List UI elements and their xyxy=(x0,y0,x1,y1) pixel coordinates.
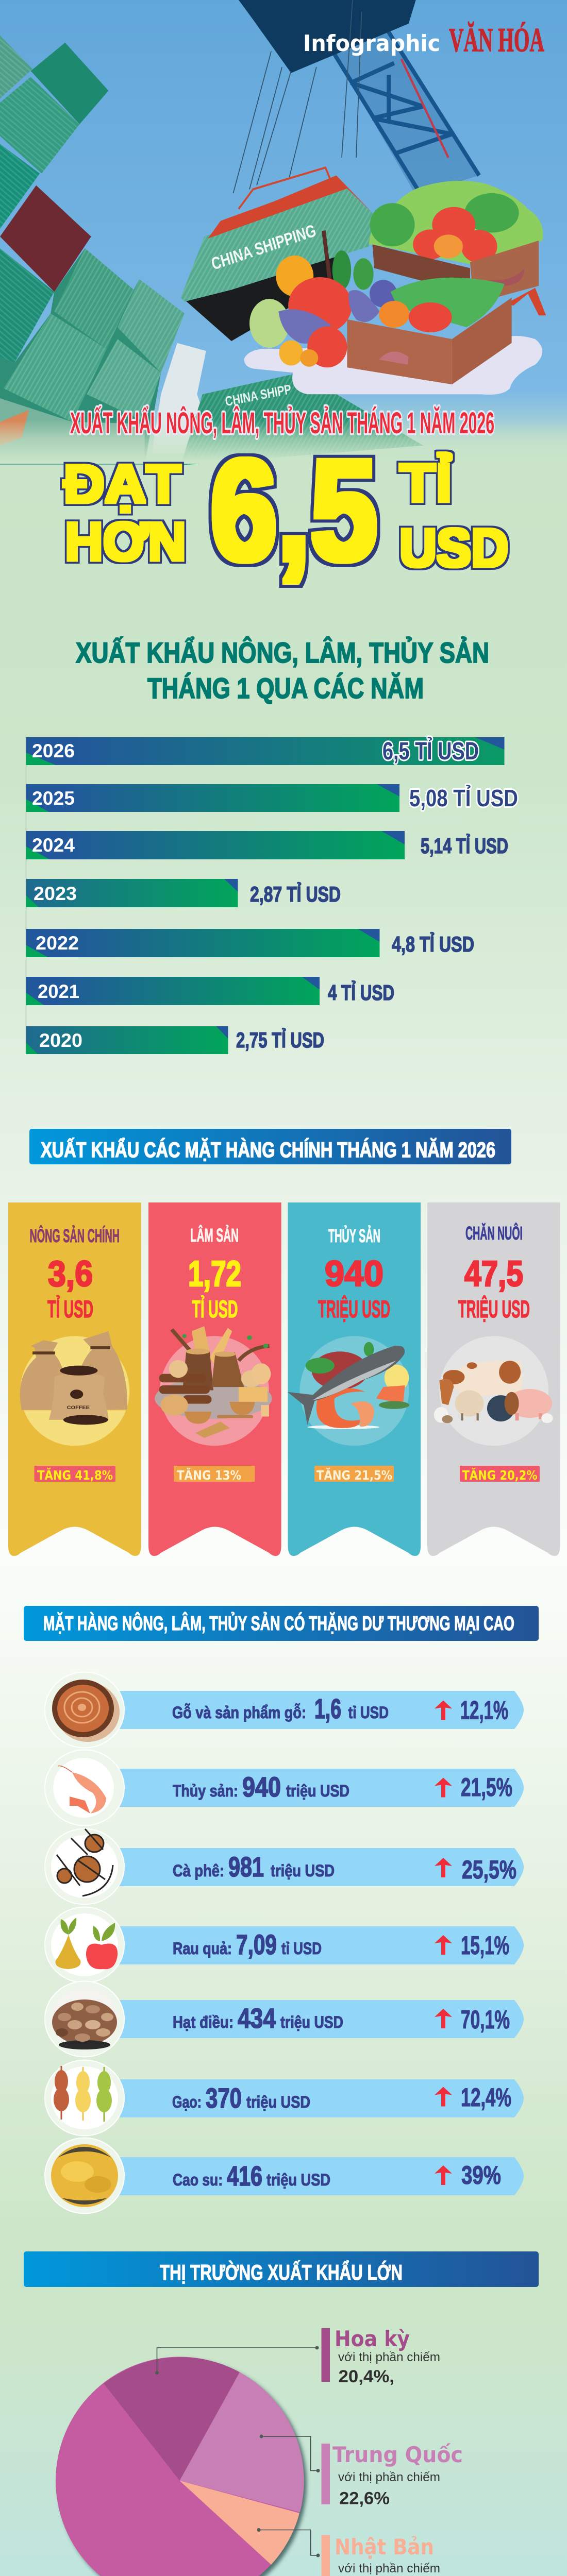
label and value xyxy=(173,1772,349,1803)
label and value: Cao su: xyxy=(173,2171,223,2189)
panel: forestry products: TỈ USD xyxy=(192,1295,238,1323)
growth badge: TĂNG 41,8% xyxy=(37,1467,113,1483)
legend: China xyxy=(322,2442,463,2508)
label and value: 7,09 xyxy=(236,1929,277,1960)
label and value xyxy=(172,1693,389,1724)
bar 2026: 6,5 TỈ USD xyxy=(382,737,479,765)
headline: tỉ usd: USD xyxy=(399,518,508,578)
panel: aquatic products xyxy=(288,1202,421,1556)
slice: Japan xyxy=(179,2481,299,2565)
chart title: THÁNG 1 QUA CÁC NĂM xyxy=(147,672,424,704)
growth percent: 21,5% xyxy=(461,1773,512,1802)
growth badge: TĂNG 13% xyxy=(177,1467,241,1483)
bar 2026: 2026 xyxy=(32,740,75,761)
bar 2026 xyxy=(26,737,504,765)
slice: other markets xyxy=(56,2357,304,2576)
panel: aquatic products: TRIỆU USD xyxy=(318,1295,390,1323)
bar 2022 xyxy=(26,929,474,957)
icon: coffee sacks xyxy=(20,1331,129,1446)
label and value: tỉ USD xyxy=(348,1703,389,1722)
label and value: tỉ USD xyxy=(281,1939,322,1958)
icon: cashew nuts xyxy=(52,1999,117,2049)
row: coffee xyxy=(45,1829,524,1904)
header brand: Infographic xyxy=(303,30,440,57)
label and value: triệu USD xyxy=(280,2013,343,2031)
bar 2022: 4,8 TỈ USD xyxy=(392,931,474,956)
bar 2024 xyxy=(26,831,508,859)
legend: China: Trung Quốc xyxy=(332,2442,463,2467)
row: aquatic products xyxy=(45,1750,524,1826)
icon: timber and wood products xyxy=(155,1326,272,1446)
bar 2025 xyxy=(26,784,518,812)
slice: United States xyxy=(104,2357,240,2481)
panel: main agricultural products: 3,6 xyxy=(48,1253,93,1294)
lower container with lettering xyxy=(181,372,423,465)
panel: main agricultural products: TỈ USD xyxy=(47,1295,93,1323)
bar 2024: 2024 xyxy=(32,835,75,856)
legend: Japan: Nhật Bản xyxy=(335,2534,434,2560)
icon: coffee beans xyxy=(57,1829,113,1896)
panel: forestry products xyxy=(148,1202,281,1556)
arrow up xyxy=(435,2165,452,2185)
arrow up xyxy=(435,2009,452,2028)
icon: pear and apple xyxy=(56,1918,118,1969)
panel: livestock xyxy=(427,1202,560,1556)
arrow up xyxy=(435,1858,452,1877)
icon: fish and seafood xyxy=(288,1336,409,1446)
label and value: 1,6 xyxy=(314,1693,341,1724)
icon: farm animals xyxy=(434,1336,553,1446)
label and value: 370 xyxy=(206,2083,242,2114)
row: rice xyxy=(45,2060,524,2136)
bar 2023: 2,87 TỈ USD xyxy=(250,882,341,906)
pie chart of export markets xyxy=(56,2357,304,2576)
legend: United States: với thị phần chiếm xyxy=(338,2350,440,2364)
label and value: 434 xyxy=(238,2003,276,2034)
headline: tỉ usd xyxy=(399,453,508,578)
label and value: 981 xyxy=(228,1852,264,1883)
stacked containers on the left xyxy=(0,36,217,465)
label and value xyxy=(173,1929,322,1960)
icon: rice stalks xyxy=(54,2066,112,2122)
bar 2020: 2020 xyxy=(39,1030,82,1051)
icon: shrimp xyxy=(58,1766,106,1814)
icon: tree ring xyxy=(52,1680,120,1742)
bar 2025: 5,08 TỈ USD xyxy=(409,785,518,811)
row: wood xyxy=(45,1672,524,1748)
label and value xyxy=(173,2003,343,2034)
slice: China xyxy=(179,2372,304,2512)
bar 2023 xyxy=(26,879,341,907)
legend: United States xyxy=(322,2326,440,2386)
label and value: triệu USD xyxy=(271,1861,335,1880)
bar 2025: 2025 xyxy=(32,788,75,809)
crane xyxy=(233,0,479,195)
headline: 6,5: 6,5 xyxy=(210,430,377,590)
label and value: 940 xyxy=(242,1772,281,1803)
legend: Japan xyxy=(322,2534,440,2576)
panel: forestry products: 1,72 xyxy=(188,1253,241,1294)
banner: main commodities xyxy=(29,1129,511,1164)
label and value: 416 xyxy=(227,2161,262,2192)
row: fruit and vegetables xyxy=(45,1907,524,1982)
chart title: XUẤT KHẨU NÔNG, LÂM, THỦY SẢN xyxy=(76,636,489,669)
banner: trade surplus xyxy=(24,1606,539,1641)
panel: main agricultural products xyxy=(8,1202,141,1556)
legend: Japan: với thị phần chiếm xyxy=(338,2562,440,2575)
headline: đạt hơn xyxy=(63,454,186,572)
label and value: Gỗ và sản phẩm gỗ: xyxy=(172,1703,306,1722)
arrow up xyxy=(435,1777,452,1797)
legend: China: với thị phần chiếm xyxy=(338,2470,440,2484)
hanging container: CHINA SHIPPING xyxy=(209,221,318,274)
bar 2023: 2023 xyxy=(34,883,77,904)
peppers and eggplants xyxy=(249,231,505,367)
legend: United States: Hoa kỳ xyxy=(335,2326,410,2351)
growth badge: TĂNG 20,2% xyxy=(462,1467,537,1483)
banner: export markets: THỊ TRƯỜNG XUẤT KHẨU LỚN xyxy=(160,2260,403,2284)
fade of hero photo into the green background xyxy=(0,420,567,464)
hanging container xyxy=(181,167,374,341)
bar chart by year xyxy=(26,737,518,1054)
bar 2020: 2,75 TỈ USD xyxy=(236,1027,324,1052)
growth percent: 15,1% xyxy=(461,1931,509,1960)
icon: raw rubber xyxy=(58,2147,111,2205)
panel: livestock: 47,5 xyxy=(464,1253,523,1294)
arrow up xyxy=(435,1935,452,1955)
greens and tomatoes in the upper crate xyxy=(369,181,543,264)
growth percent: 12,1% xyxy=(460,1696,508,1725)
arrow up xyxy=(435,1700,452,1720)
headline: đạt hơn: HƠN xyxy=(65,512,186,572)
label and value xyxy=(173,2161,330,2192)
leader lines xyxy=(155,2346,321,2576)
lower crate xyxy=(347,298,512,384)
panel: main agricultural products: NÔNG SẢN CHÍNH xyxy=(30,1225,120,1246)
growth percent: 39% xyxy=(461,2161,501,2190)
label and value: Rau quả: xyxy=(173,1939,232,1958)
label and value: Hạt điều: xyxy=(173,2013,234,2031)
growth percent: 70,1% xyxy=(461,2005,510,2034)
bar 2020 xyxy=(26,1026,324,1054)
legend: United States: 20,4%, xyxy=(338,2367,394,2386)
bar 2022: 2022 xyxy=(36,933,79,954)
arrow up xyxy=(435,2087,452,2106)
panel: aquatic products: 940 xyxy=(325,1253,383,1294)
bar 2024: 5,14 TỈ USD xyxy=(421,833,508,858)
headline xyxy=(63,406,508,590)
panel: forestry products: LÂM SẢN xyxy=(190,1224,239,1246)
bar 2021: 4 TỈ USD xyxy=(328,980,394,1005)
bar 2021: 2021 xyxy=(38,981,79,1002)
legend: China: 22,6% xyxy=(339,2488,390,2508)
hero photo: port, crane and containers xyxy=(0,0,546,465)
panel: aquatic products: THỦY SẢN xyxy=(328,1225,380,1246)
growth percent: 12,4% xyxy=(461,2083,511,2112)
icon: coffee sacks: COFFEE xyxy=(67,1405,90,1411)
banner: export markets xyxy=(24,2251,539,2287)
row: rubber xyxy=(45,2138,524,2213)
chart title xyxy=(76,636,489,704)
label and value: Thủy sản: xyxy=(173,1782,238,1800)
header brand xyxy=(303,22,544,59)
label and value xyxy=(172,2083,310,2114)
growth percent: 25,5% xyxy=(462,1855,516,1884)
label and value: Cà phê: xyxy=(173,1861,224,1880)
growth badge: TĂNG 21,5% xyxy=(316,1467,392,1483)
row: cashew xyxy=(45,1981,524,2057)
label and value: triệu USD xyxy=(266,2171,330,2189)
illustration: vegetable crates xyxy=(244,181,546,395)
headline: tỉ usd: TỈ xyxy=(399,453,452,513)
bar 2021 xyxy=(26,977,394,1005)
label and value xyxy=(173,1852,335,1883)
label and value: Gạo: xyxy=(172,2093,202,2111)
label and value: triệu USD xyxy=(246,2093,310,2111)
label and value: triệu USD xyxy=(286,1782,349,1800)
upper crate xyxy=(373,241,539,303)
headline: đạt hơn: ĐẠT xyxy=(63,454,181,514)
lower container with lettering: CHINA SHIPP xyxy=(224,382,292,409)
